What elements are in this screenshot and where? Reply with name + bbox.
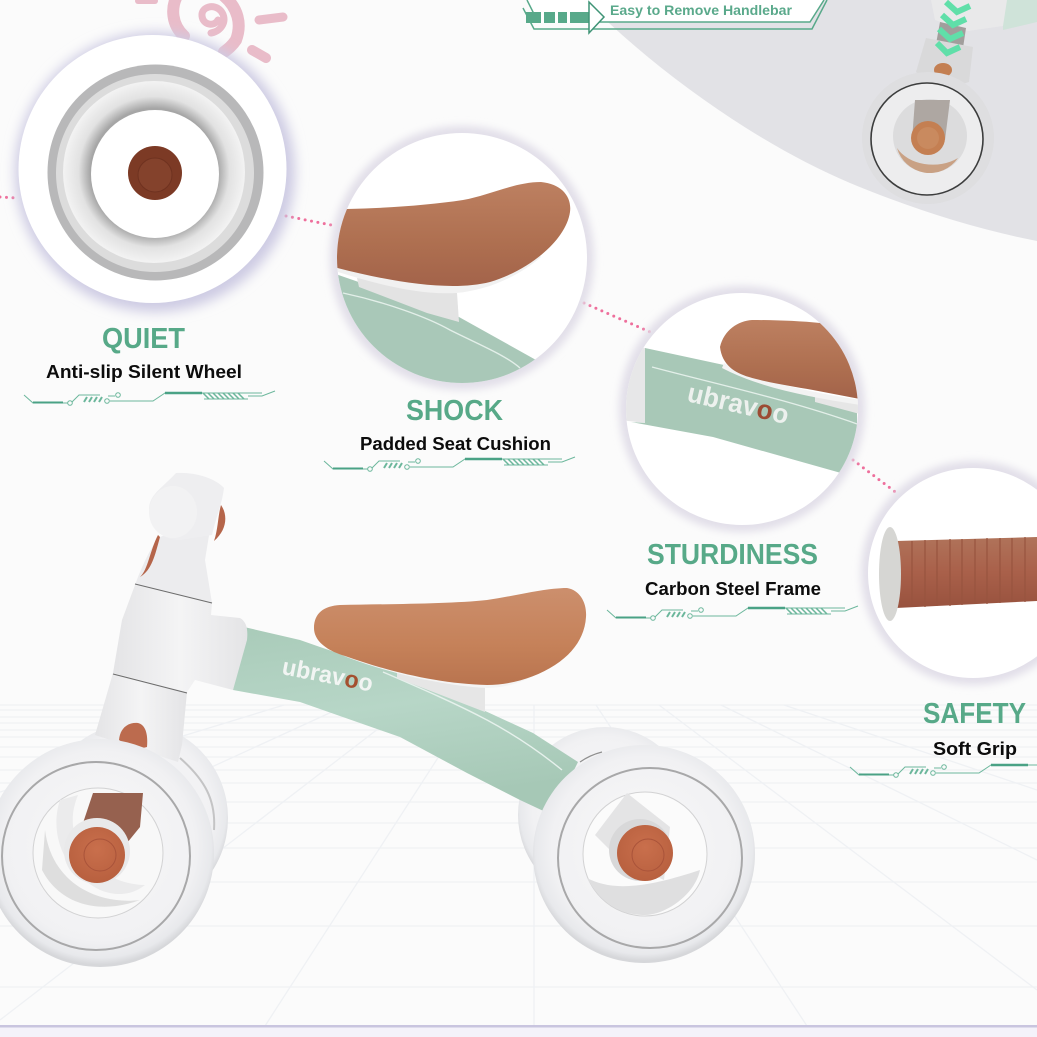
floor grid (0, 705, 1037, 1026)
grey corner blob (585, 0, 1037, 241)
label: sturdiness: STURDINESS (647, 539, 818, 571)
front wheel (0, 739, 214, 967)
panel: sturdiness frame circle (619, 286, 865, 532)
label: sturdiness (607, 539, 858, 620)
panel: quiet wheel circle (15, 32, 295, 312)
label: quiet (24, 323, 275, 405)
top label: easy to remove handlebar (523, 0, 827, 33)
rear wheel (533, 745, 755, 963)
seat cushion (314, 588, 586, 685)
main balance bike (0, 473, 755, 967)
label: safety (850, 698, 1037, 777)
logo on frame: ubravoo (280, 653, 375, 697)
panel: safety grip circle (861, 461, 1037, 685)
top label: easy to remove handlebar: Easy to Remove Handlebar (610, 2, 793, 18)
rear far wheel (518, 727, 692, 903)
bottom border line (0, 1025, 1037, 1037)
front far wheel (42, 723, 228, 913)
frame stub (1003, 0, 1037, 30)
chevrons (937, 2, 970, 53)
label: shock: Padded Seat Cushion (360, 434, 551, 454)
removable handlebar mini bike (862, 0, 1037, 204)
decorative pink spiral (138, 0, 283, 58)
label: sturdiness: Carbon Steel Frame (645, 579, 821, 599)
label: quiet: Anti-slip Silent Wheel (46, 362, 242, 382)
label: safety: Soft Grip (933, 739, 1017, 759)
label: shock: SHOCK (406, 395, 503, 427)
fork stem and head (95, 473, 247, 762)
label: quiet: QUIET (102, 323, 185, 355)
panel: shock seat circle (330, 126, 594, 400)
label: safety: SAFETY (923, 698, 1026, 730)
green frame (233, 627, 578, 815)
logo: ubravoo: ubravoo (685, 378, 792, 430)
seat bracket (397, 669, 485, 712)
label: shock (324, 395, 575, 471)
seat plate (326, 648, 560, 688)
dotted connector lines (0, 197, 898, 494)
